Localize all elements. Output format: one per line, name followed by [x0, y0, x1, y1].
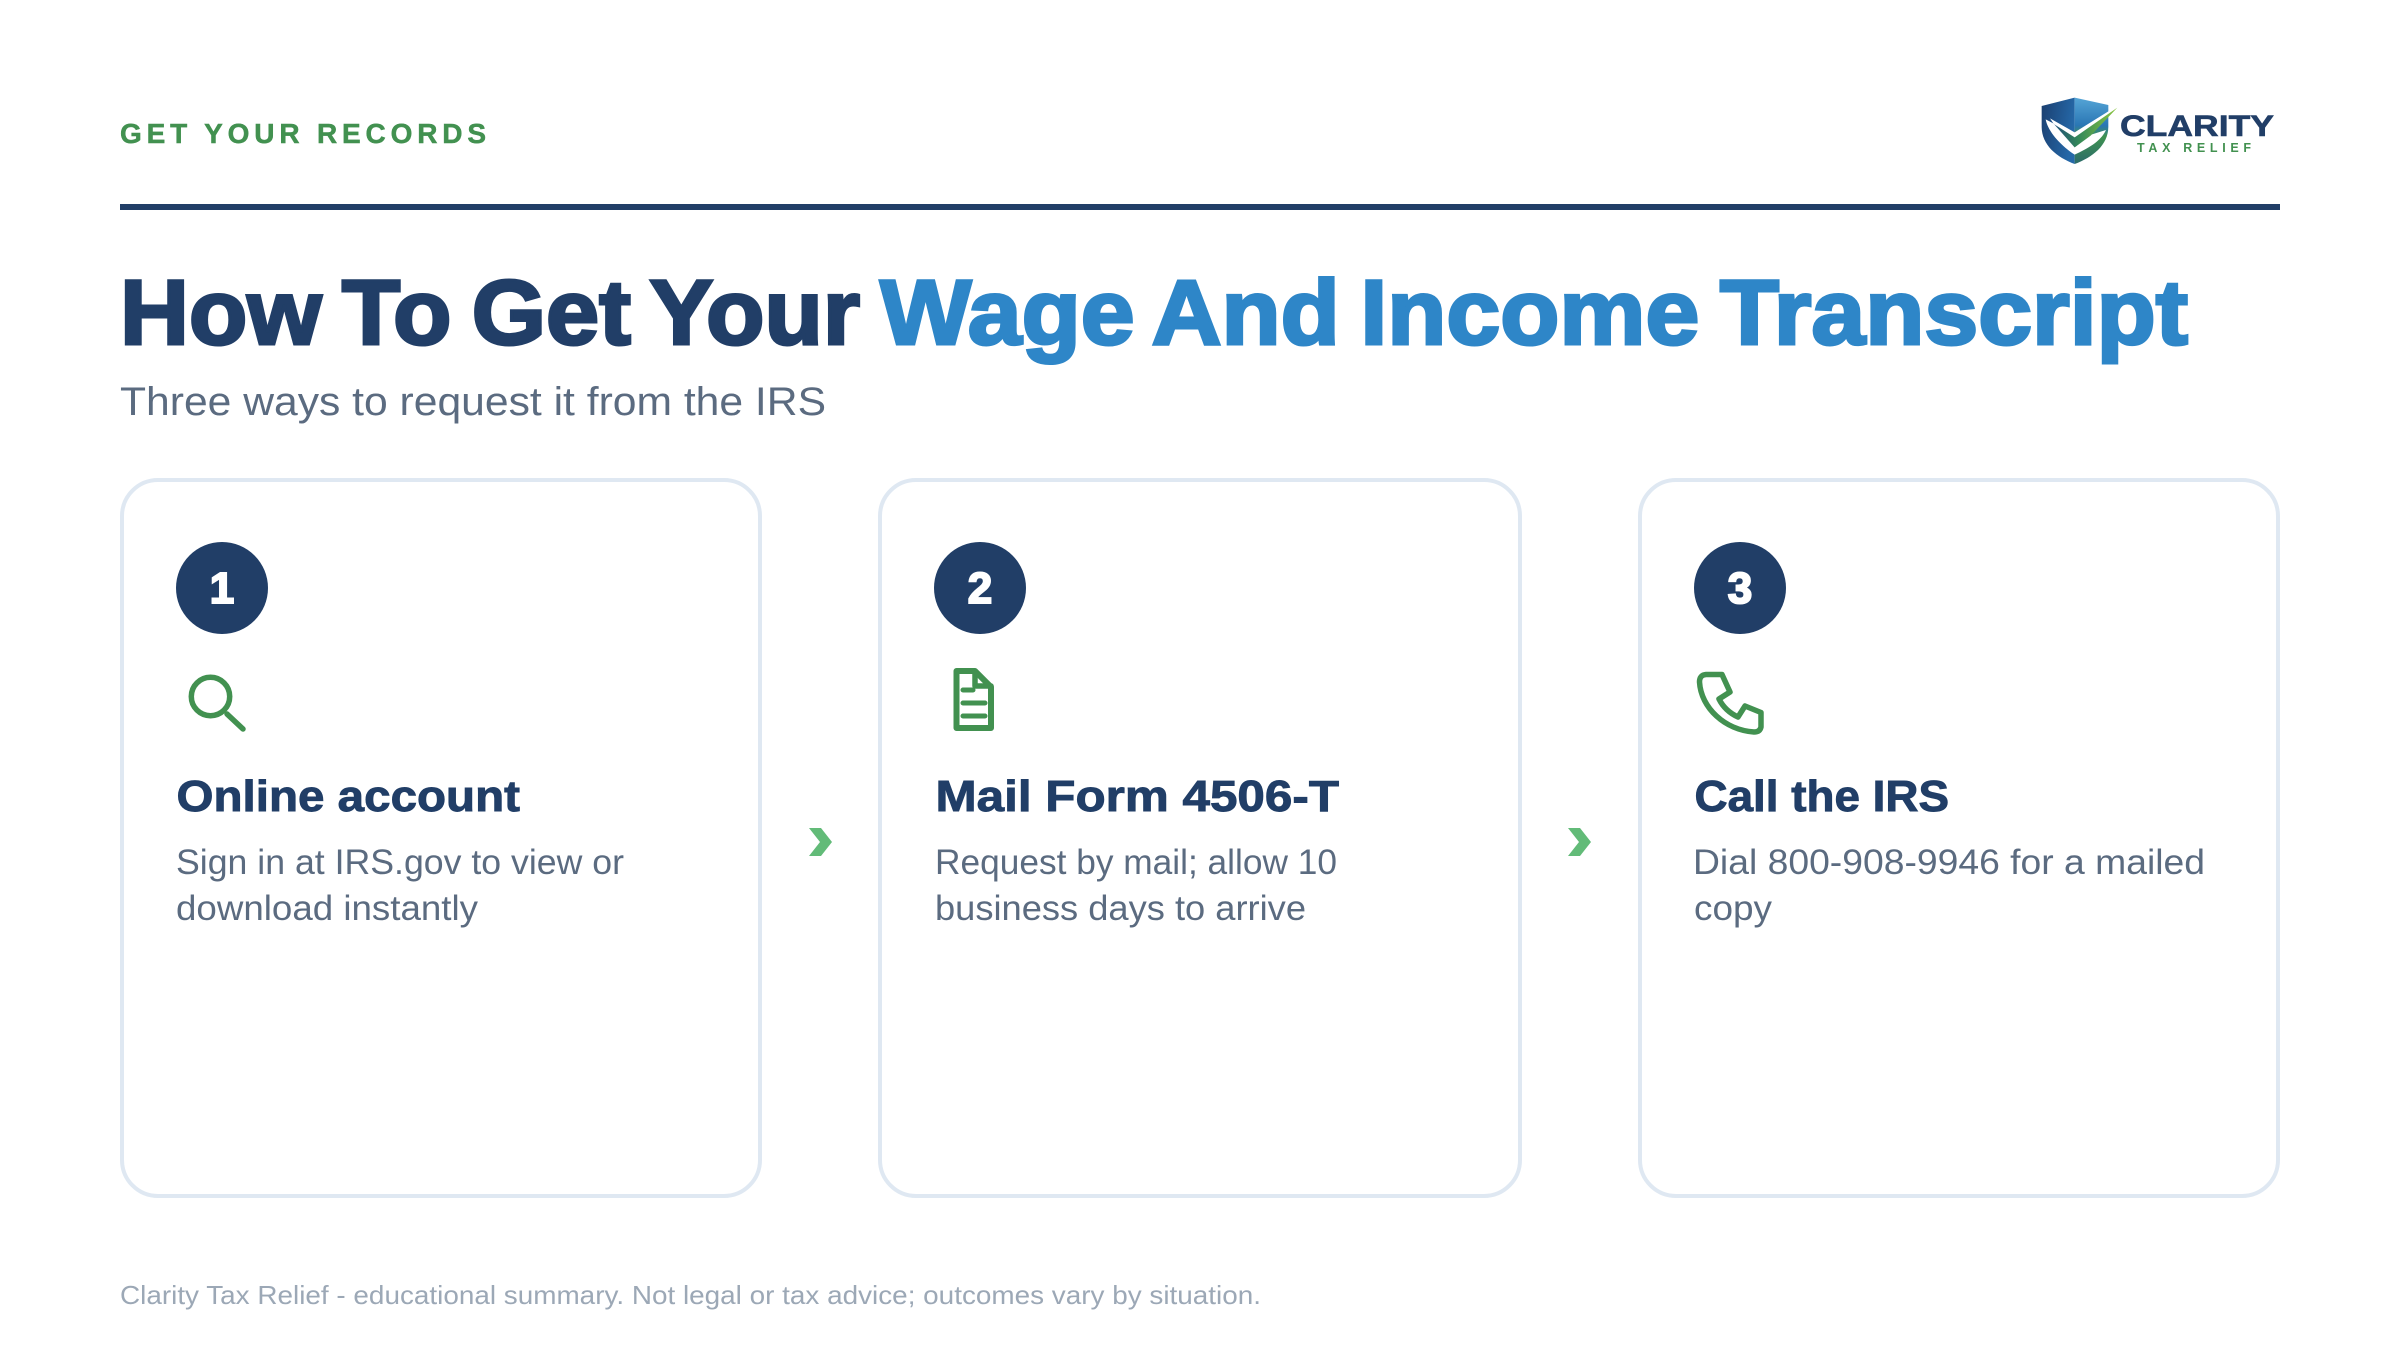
- icon: magnifying glass: [191, 677, 243, 729]
- logo: Clarity Tax Relief: [2042, 98, 2274, 164]
- footer disclaimer: Clarity Tax Relief - educational summary. Not legal or tax advice; outcomes vary by situation.: [120, 1280, 1261, 1310]
- step number 2: [934, 542, 1026, 634]
- subtitle: Three ways to request it from the IRS: [120, 380, 826, 424]
- step number 1: [176, 542, 268, 634]
- arrow 1: [809, 828, 832, 856]
- card 2 heading: Mail Form 4506-T: [936, 772, 1339, 821]
- card 1 outline: [122, 480, 760, 1196]
- logo shield: [2042, 98, 2117, 164]
- panel: step 3 call the IRS: [1640, 480, 2278, 1196]
- card 1 description: download instantly: [176, 889, 479, 928]
- arrow 2: [1568, 828, 1591, 856]
- step number 1: 1: [210, 564, 234, 613]
- card 3 description: copy: [1694, 889, 1773, 928]
- panel: step 1 online account: [122, 480, 760, 1196]
- title: navy part: How To Get Your: [120, 262, 860, 364]
- card 2 description: Request by mail; allow 10: [935, 843, 1337, 882]
- step number 3: [1694, 542, 1786, 634]
- logo tagline: TAX RELIEF: [2137, 141, 2251, 155]
- card 2 description: [935, 843, 1337, 928]
- logo wordmark: CLARITY: [2120, 110, 2274, 143]
- card 1 description: Sign in at IRS.gov to view or: [176, 843, 624, 882]
- card 2 outline: [880, 480, 1520, 1196]
- step number 2: 2: [968, 564, 992, 613]
- step number 3: 3: [1728, 564, 1752, 613]
- panel: step 2 mail form: [880, 480, 1520, 1196]
- title: [120, 262, 2188, 364]
- card 3 description: Dial 800-908-9946 for a mailed: [1693, 843, 2205, 882]
- card 3 heading: Call the IRS: [1694, 772, 1949, 821]
- card 1 heading: Online account: [176, 772, 520, 821]
- icon: phone: [1700, 674, 1761, 732]
- card 1 description: [176, 843, 624, 928]
- icon: document: [956, 671, 991, 728]
- header rule: [120, 204, 2280, 210]
- card 2 description: business days to arrive: [935, 889, 1306, 928]
- title: blue part: Wage And Income Transcript: [880, 262, 2188, 364]
- card 3 description: [1693, 843, 2205, 928]
- eyebrow label: GET YOUR RECORDS: [120, 118, 486, 149]
- card 3 outline: [1640, 480, 2278, 1196]
